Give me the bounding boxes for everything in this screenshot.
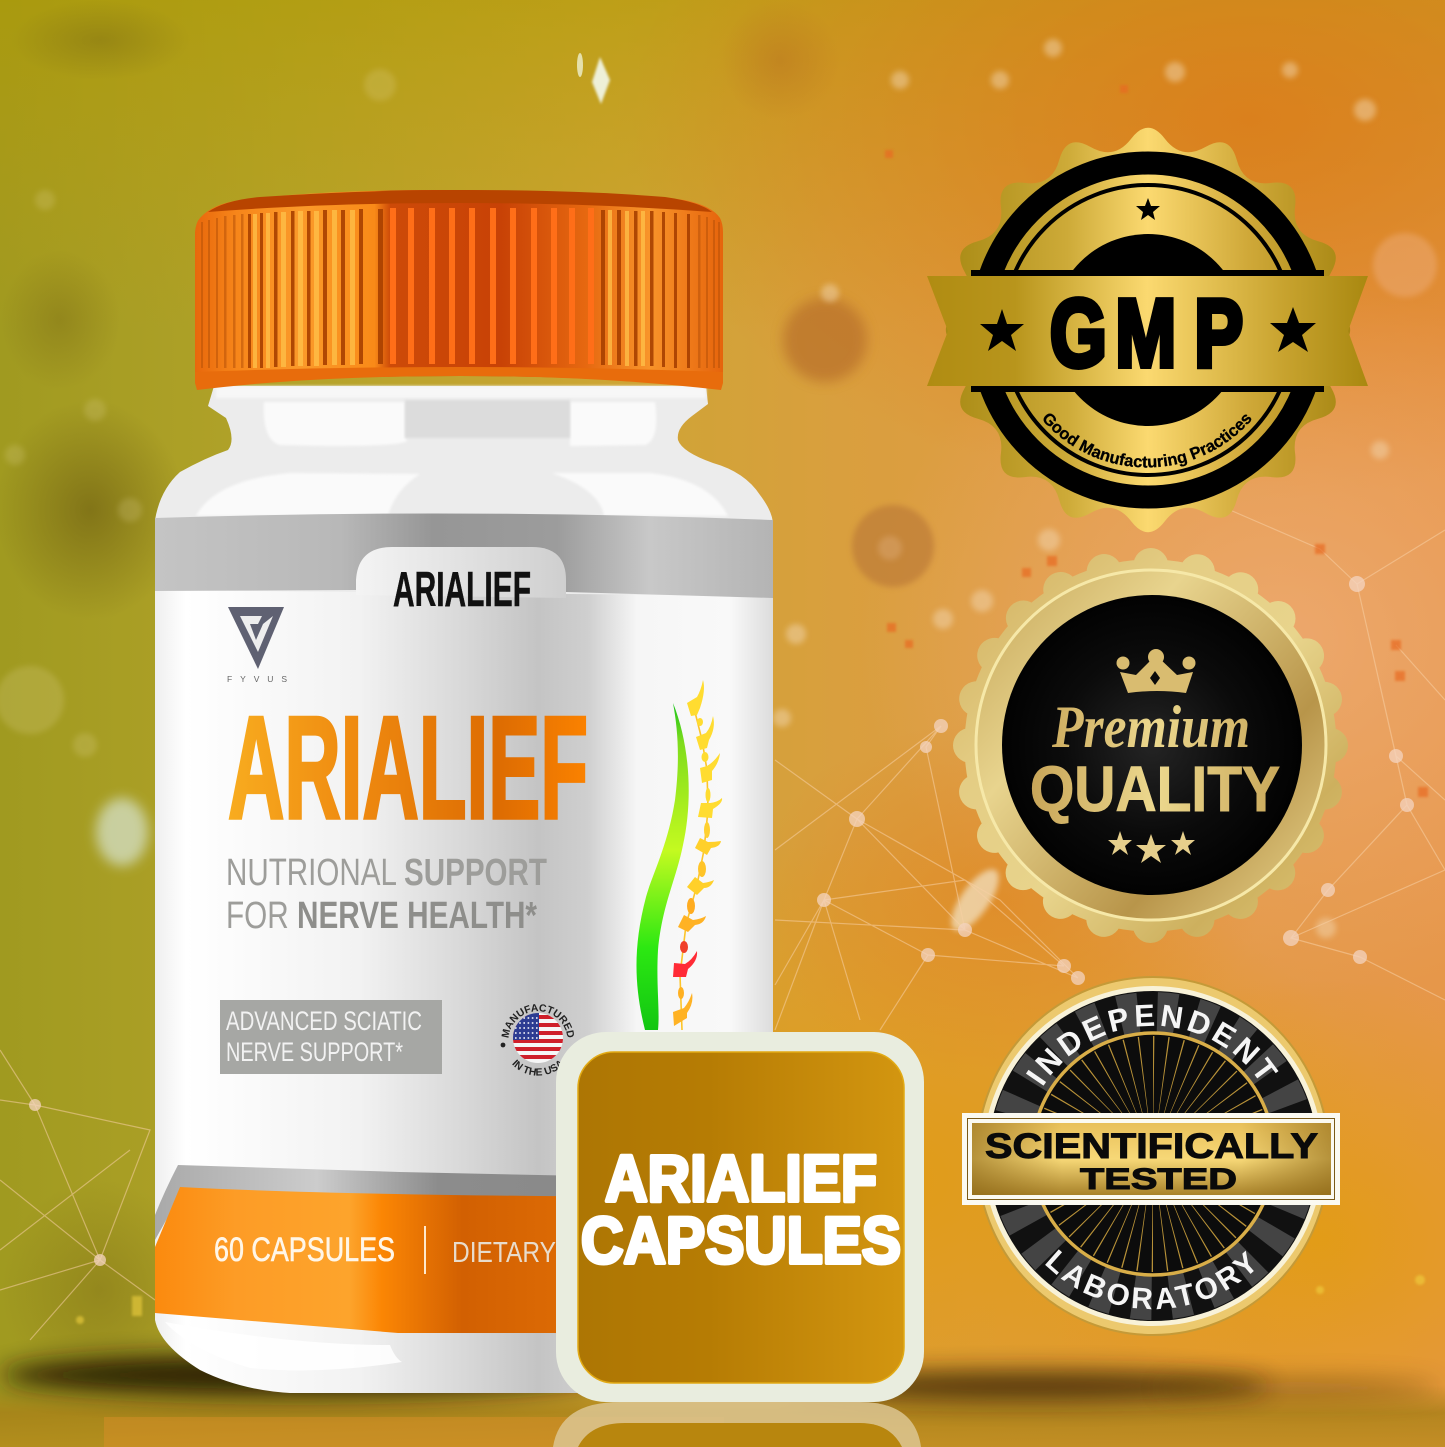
GMP badge	[927, 128, 1368, 532]
ring	[976, 570, 1326, 920]
vertebrae	[673, 680, 722, 1030]
bottle neck and shoulder	[155, 386, 773, 1000]
arc caption: Good Manufacturing Practices	[1044, 414, 1252, 468]
brand tab	[356, 547, 566, 617]
band separator	[424, 1226, 426, 1274]
bottle	[155, 190, 773, 1393]
icon: made in USA seal: IN THE USA	[512, 1059, 560, 1076]
shoulder highlights	[196, 386, 728, 516]
GMP text: GMP	[1050, 280, 1243, 387]
side grooves	[248, 209, 690, 368]
green nerve	[636, 703, 689, 1030]
premium quality badge	[964, 560, 1336, 932]
orange cap	[195, 190, 723, 390]
banner	[962, 1113, 1340, 1205]
black ring	[988, 991, 1318, 1321]
ribbon	[927, 276, 1368, 386]
bottom highlight	[165, 1322, 402, 1370]
ground shadow	[0, 1353, 1445, 1447]
black disc	[1002, 595, 1302, 895]
subtitle	[226, 852, 547, 937]
side rib highlights	[253, 210, 645, 368]
grey callout: ADVANCED SCIATIC	[226, 1006, 422, 1036]
quality text: QUALITY	[1030, 753, 1280, 825]
gold seal	[946, 128, 1350, 532]
grey callout	[220, 1000, 442, 1074]
laboratory arc: LABORATORY	[1045, 1249, 1254, 1310]
premium script: Premium	[1051, 694, 1250, 760]
icon: made in USA seal	[500, 1004, 574, 1076]
tile heading	[581, 1141, 901, 1277]
banner: SCIENTIFICALLY	[985, 1127, 1318, 1166]
tile face	[578, 1052, 904, 1383]
gold rays	[1083, 1084, 1223, 1224]
icon: FV logo	[227, 607, 287, 684]
gold outer ring	[977, 977, 1329, 1335]
label body	[155, 590, 773, 1393]
product name: ARIALIEF	[228, 686, 588, 849]
three stars	[1108, 831, 1195, 863]
center ribs	[390, 208, 594, 364]
tile heading: ARIALIEF	[605, 1141, 877, 1215]
icon: made in USA seal: MANUFACTURED	[502, 1004, 574, 1038]
edge ribs	[201, 214, 720, 368]
brand tab: ARIALIEF	[393, 563, 531, 617]
capsule count: 60 CAPSULES	[214, 1231, 395, 1269]
banner: TESTED	[1080, 1163, 1237, 1196]
capsule square tile	[556, 1032, 924, 1402]
subtitle: NUTRIONAL SUPPORT	[226, 852, 547, 894]
gold seal	[964, 560, 1336, 932]
tile heading: CAPSULES	[581, 1203, 901, 1277]
right star	[1270, 307, 1316, 352]
scientifically tested badge	[962, 976, 1340, 1336]
neck shade	[405, 400, 570, 438]
icon: spine illustration	[636, 680, 722, 1030]
subtitle: FOR NERVE HEALTH*	[226, 895, 537, 937]
dietary text: DIETARY	[452, 1237, 556, 1269]
icon: FV logo: FYVUS	[227, 674, 287, 684]
small star	[1136, 198, 1160, 220]
orange band	[155, 1187, 773, 1340]
icon: crown	[1116, 649, 1196, 693]
tile frame	[556, 1032, 924, 1402]
top rim	[208, 190, 712, 212]
grey callout: NERVE SUPPORT*	[226, 1037, 403, 1067]
white ring	[983, 986, 1323, 1326]
bottom lip	[195, 367, 723, 390]
black rings	[971, 163, 1324, 497]
inner gold ring	[1032, 1033, 1274, 1275]
grey label band	[155, 513, 773, 598]
inner hub	[1131, 1132, 1175, 1176]
left star	[980, 309, 1024, 351]
lower grey strip	[155, 1165, 773, 1240]
ring segments	[1011, 1014, 1295, 1298]
independent arc: INDEPENDENT	[1026, 1004, 1278, 1086]
